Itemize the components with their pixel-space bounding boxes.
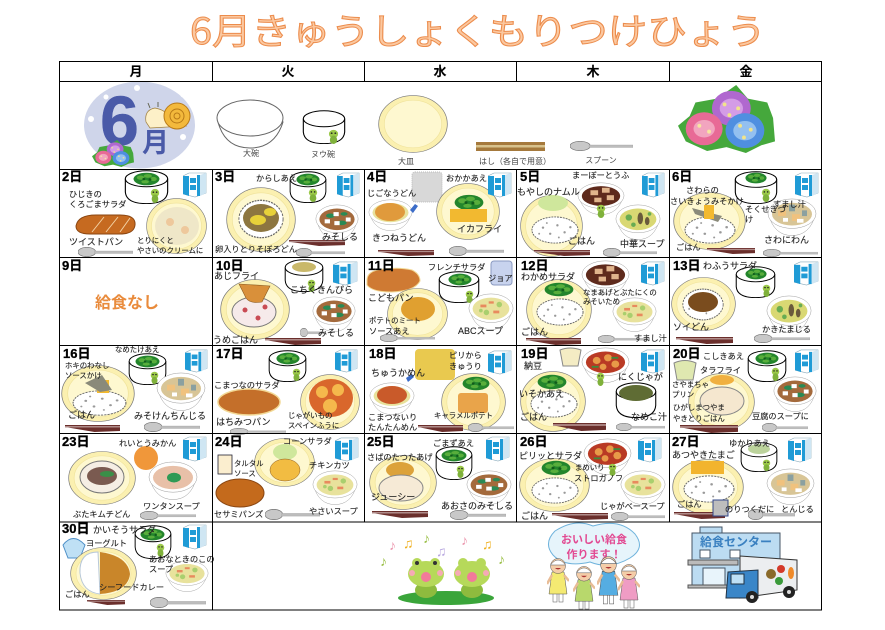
panel: day 24: 24日 bbox=[215, 434, 242, 449]
panel: day 20: ひがしまつやま bbox=[673, 403, 725, 412]
panel: day 18: こまつないり bbox=[368, 413, 417, 422]
speech cloud: 作ります！ bbox=[566, 547, 622, 561]
panel: day 16: ごはん bbox=[68, 409, 95, 420]
panel: day 4: イカフライ bbox=[457, 224, 502, 234]
panel: day 5: 5日 bbox=[520, 169, 540, 184]
panel: day 16 bbox=[62, 345, 207, 432]
panel: day 25: あおさのみそしる bbox=[441, 501, 513, 511]
icon: June badge with snail: 6 bbox=[100, 82, 139, 160]
icon: delivery truck bbox=[726, 556, 797, 603]
panel: day 5: まーぼーとうふ bbox=[572, 171, 629, 180]
panel: day 12: みそいため bbox=[583, 297, 620, 306]
panel: day 11: ポテトのミート bbox=[369, 316, 421, 325]
panel: day 11: ABCスープ bbox=[458, 326, 503, 336]
label: large plate: 大皿 bbox=[398, 156, 414, 166]
panel: day 17: スペインふうに bbox=[288, 421, 339, 430]
panel: day 6: さわらの bbox=[686, 186, 719, 195]
panel: day 26 bbox=[519, 434, 665, 521]
panel: day 27: のりつくだに bbox=[725, 505, 774, 514]
panel: day 11: ジョア bbox=[488, 274, 513, 283]
panel: day 20: こしきあえ bbox=[703, 352, 744, 361]
icon: music notes bbox=[380, 530, 505, 569]
label: lunch centre: 給食センター bbox=[700, 534, 772, 549]
panel: day 10: 10日 bbox=[216, 258, 243, 273]
panel: day 6 bbox=[670, 169, 818, 257]
panel: day 4: おかかあえ bbox=[446, 174, 487, 183]
panel: day 6: さわにわん bbox=[764, 235, 809, 245]
panel: day 2: ツイストパン bbox=[69, 237, 123, 247]
panel: day 19: なめこ汁 bbox=[631, 411, 667, 422]
panel: day 18: ちゅうかめん bbox=[371, 368, 425, 378]
panel: day 3: 3日 bbox=[215, 169, 235, 184]
panel: day 19 bbox=[519, 346, 667, 431]
icon: large plate bbox=[379, 96, 447, 152]
panel: day 18: ピリから bbox=[449, 351, 482, 360]
weekday header row: 火 bbox=[281, 64, 295, 79]
panel: day 3: みそしる bbox=[322, 232, 358, 242]
weekday header row: 金 bbox=[739, 64, 753, 79]
panel: day 5: ごはん bbox=[568, 235, 595, 246]
panel: day 13: わふうサラダ bbox=[703, 260, 757, 271]
panel: day 17: 17日 bbox=[216, 346, 243, 361]
panel: day 12: すまし汁 bbox=[634, 333, 667, 343]
label: small bowl: ヌウ碗 bbox=[311, 150, 335, 159]
panel: day 30: 30日 bbox=[62, 521, 89, 536]
panel: day 16: ホキのわなし bbox=[65, 361, 109, 370]
panel: day 18: きゅうり bbox=[449, 362, 482, 371]
speech cloud: おいしい給食 bbox=[561, 532, 627, 546]
panel: day 24: やさいスープ bbox=[309, 507, 358, 516]
panel: day 24 bbox=[214, 434, 358, 520]
panel: day 2: ひじきの bbox=[69, 190, 102, 199]
panel: day 13 bbox=[672, 258, 818, 344]
icon: music notes: ♪ bbox=[498, 551, 505, 567]
panel: day 4 bbox=[367, 169, 511, 256]
panel: day 12: なまあげとぶたにくの bbox=[583, 288, 657, 297]
panel: day 25 bbox=[367, 434, 513, 520]
panel: day 6: すまし汁 bbox=[773, 199, 806, 209]
label: large bowl: 大碗 bbox=[243, 148, 259, 158]
illustration: kitchen staff with speech cloud bbox=[547, 523, 640, 609]
panel: day 23: ワンタンスープ bbox=[143, 502, 200, 511]
panel: day 10: あじフライ bbox=[214, 271, 259, 281]
icon: small soup bowl bbox=[303, 111, 345, 144]
panel: day 30: ヨーグルト bbox=[86, 538, 127, 548]
panel: day 4: きつねうどん bbox=[372, 233, 426, 243]
panel: day 13: 13日 bbox=[673, 258, 700, 273]
panel: day 19: ごはん bbox=[520, 411, 547, 422]
icon: spoon bbox=[570, 141, 633, 151]
panel: day 18 bbox=[368, 346, 514, 432]
icon: music notes: ♪ bbox=[423, 530, 430, 546]
panel: day 5 bbox=[517, 169, 664, 257]
panel: day 20 bbox=[672, 346, 818, 433]
panel: day 10: みそしる bbox=[318, 328, 354, 338]
panel: day 20: プリン bbox=[672, 390, 694, 399]
panel: day 26: まめいり bbox=[575, 463, 605, 472]
panel: day 26: じゃがべースープ bbox=[600, 501, 665, 511]
panel: day 25: ジューシー bbox=[371, 492, 415, 502]
label: spoon: スプーン bbox=[585, 156, 617, 165]
table grid bbox=[59, 61, 822, 610]
panel: day 19: いそかあえ bbox=[519, 389, 564, 399]
icon: music notes: ♫ bbox=[403, 535, 414, 551]
panel: day 3: 卵入りとりそぼろどん bbox=[215, 244, 297, 254]
panel: day 30: ごはん bbox=[65, 589, 90, 599]
panel: day 16: なめたけあえ bbox=[115, 345, 159, 354]
panel: day 13: かきたまじる bbox=[762, 325, 811, 334]
panel: day 12: 12日 bbox=[521, 258, 548, 273]
panel: day 30: スープ bbox=[149, 565, 174, 574]
label: chopsticks: はし（各自で用意） bbox=[479, 156, 551, 166]
panel: day 30: あおなときのこの bbox=[149, 555, 215, 564]
panel: day 6: け bbox=[745, 215, 753, 224]
icon: music notes: ♪ bbox=[461, 532, 468, 548]
panel: day 12 bbox=[521, 258, 667, 345]
no lunch notice: 給食なし bbox=[95, 293, 159, 312]
weekday header row: 水 bbox=[433, 64, 447, 79]
panel: day 25: 25日 bbox=[367, 434, 394, 449]
panel: day 23: れいとうみかん bbox=[119, 439, 176, 448]
panel: day 12: ごはん bbox=[521, 326, 548, 337]
panel: tableware legend bbox=[84, 82, 775, 168]
panel: day 27: 27日 bbox=[672, 434, 699, 449]
panel: day 26: ピリッとサラダ bbox=[519, 450, 582, 461]
panel: day 19: 納豆 bbox=[524, 360, 542, 371]
panel: day 3 bbox=[215, 169, 359, 257]
panel: day 26: 26日 bbox=[520, 434, 547, 449]
panel: day 20: やきとりごはん bbox=[673, 414, 725, 423]
panel: day 2: 2日 bbox=[62, 169, 82, 184]
panel: day 4: 4日 bbox=[367, 169, 387, 184]
panel: day 23: 23日 bbox=[62, 434, 89, 449]
panel: day 10: こちくきんぴら bbox=[290, 285, 353, 295]
panel: day 27: ゆかりあえ bbox=[729, 439, 770, 448]
panel: day 11: フレンチサラダ bbox=[428, 262, 485, 272]
icon: large bowl bbox=[217, 100, 283, 148]
title: 6月きゅうしょくもりつけひょう bbox=[190, 3, 766, 55]
panel: day 3: からしあえ bbox=[256, 174, 297, 183]
panel: day 24: ソース bbox=[234, 469, 256, 478]
panel: day 11: こどもパン bbox=[368, 293, 413, 303]
panel: day 6: さいきょうみそかけ bbox=[670, 197, 744, 206]
panel: day 20: タラフライ bbox=[700, 366, 741, 375]
panel: day 6: 6日 bbox=[672, 169, 692, 184]
panel: day 17: じゃがいもの bbox=[288, 411, 332, 420]
panel: day 24: チキンカツ bbox=[309, 461, 350, 470]
panel: day 2: とりにくと bbox=[137, 236, 174, 245]
panel: day 20: 20日 bbox=[673, 346, 700, 361]
panel: day 2: くろごまサラダ bbox=[69, 199, 126, 209]
panel: day 18: たんたんめん bbox=[368, 423, 417, 432]
panel: day 19: 19日 bbox=[521, 346, 548, 361]
speech cloud bbox=[548, 523, 639, 565]
panel: day 2 bbox=[62, 169, 206, 257]
panel: day 24: セサミパンズ bbox=[214, 509, 263, 519]
panel: day 30: かいそうサラダ bbox=[93, 524, 156, 535]
panel: day 20: さやまちゃ bbox=[672, 380, 709, 389]
panel: day 9 bbox=[62, 258, 159, 312]
weekday header row: 月 bbox=[129, 64, 143, 79]
panel: day 16: 16日 bbox=[63, 346, 90, 361]
icon: music notes: ♫ bbox=[482, 536, 492, 552]
panel: day 17 bbox=[214, 346, 359, 435]
panel: day 4: じごなうどん bbox=[367, 188, 416, 198]
panel: day 30 bbox=[62, 521, 215, 608]
panel: day 25: ごまずあえ bbox=[433, 438, 474, 448]
panel: day 30: シーフードカレー bbox=[99, 583, 164, 592]
panel: day 20: 豆腐のスープに bbox=[752, 411, 809, 421]
panel: day 18: 18日 bbox=[369, 346, 396, 361]
panel: day 11: ソースあえ bbox=[369, 327, 410, 336]
panel: day 9: 9日 bbox=[62, 258, 82, 273]
weekday header row: 木 bbox=[586, 64, 600, 79]
panel: day 17: はちみつパン bbox=[216, 417, 270, 427]
icon: music notes: ♫ bbox=[436, 543, 446, 559]
icon: music notes: ♪ bbox=[389, 537, 396, 553]
panel: day 11 bbox=[367, 258, 513, 342]
panel: day 23 bbox=[62, 434, 206, 520]
panel: day 18: キャラメルポテト bbox=[434, 411, 493, 420]
icon: June badge with snail: 月 bbox=[142, 121, 169, 160]
panel: day 2: やさいのクリームに bbox=[137, 246, 203, 255]
panel: day 10 bbox=[213, 258, 357, 345]
panel: day 23: ぶたキムチどん bbox=[73, 510, 130, 519]
icon: music notes: ♪ bbox=[380, 553, 387, 569]
panel: day 12: わかめサラダ bbox=[521, 271, 575, 282]
panel: day 10: うめごはん bbox=[213, 334, 258, 345]
icon: chopsticks bbox=[476, 142, 545, 151]
illustration: singing frogs bbox=[380, 530, 505, 605]
panel: day 13: ソイどん bbox=[673, 322, 709, 332]
icon: June badge with snail bbox=[84, 82, 195, 168]
panel: day 25: さばのたつたあげ bbox=[367, 453, 433, 462]
panel: day 27 bbox=[672, 434, 814, 520]
icon: hydrangea bbox=[678, 85, 775, 153]
panel: day 24: コーンサラダ bbox=[283, 436, 332, 446]
panel: day 6: ごはん bbox=[676, 242, 701, 252]
panel: day 11: 11日 bbox=[368, 258, 395, 273]
panel: day 5: 中華スープ bbox=[620, 238, 664, 249]
panel: day 5: もやしのナムル bbox=[517, 187, 580, 197]
weekday header row bbox=[129, 64, 753, 79]
panel: day 26: ストロガノフ bbox=[574, 473, 623, 483]
panel: day 27: ごはん bbox=[677, 499, 702, 509]
panel: day 16: ソースかけ bbox=[65, 371, 102, 380]
panel: day 16: みそけんちんじる bbox=[134, 411, 206, 421]
panel: day 27: とんじる bbox=[781, 505, 814, 514]
panel: day 6: そくせきづ bbox=[745, 205, 786, 214]
panel: day 24: タルタル bbox=[234, 459, 264, 468]
panel: day 19: にくじゃが bbox=[618, 371, 663, 382]
illustration: lunch centre and truck bbox=[688, 527, 797, 603]
panel: day 26: ごはん bbox=[521, 510, 548, 521]
panel: day 27: あつやきたまご bbox=[672, 449, 735, 460]
panel: day 17: こまつなのサラダ bbox=[214, 380, 280, 390]
